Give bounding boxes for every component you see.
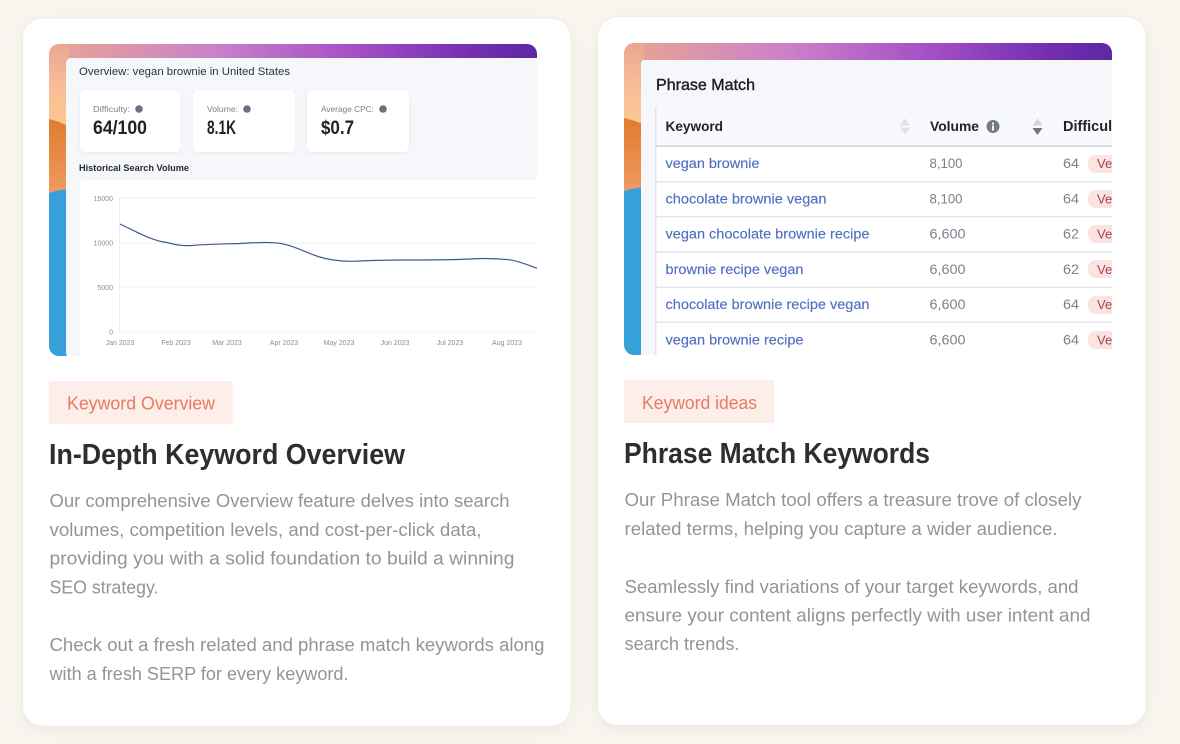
line chart: historical search volume: [80, 180, 550, 360]
row: chocolate brownie recipe vegan: Very: [1097, 297, 1124, 312]
line chart: historical search volume: Mar 2023: [212, 340, 242, 347]
line chart: historical search volume: Jun 2023: [381, 340, 410, 347]
metric: average cpc: [307, 90, 409, 152]
text block: overview description: with a fresh SERP for every keyword.: [48, 664, 348, 684]
text block: phrase match description: Seamlessly find variations of your target keywords, and: [624, 577, 1078, 597]
row: chocolate brownie vegan: Very: [1097, 192, 1124, 206]
row: vegan brownie recipe: 64: [1063, 332, 1079, 348]
line chart: historical search volume: 0: [109, 330, 113, 336]
screenshot: keyword overview: [47, 44, 550, 360]
row: vegan chocolate brownie recipe: [666, 225, 1128, 243]
line chart: historical search volume: 10000: [94, 240, 113, 248]
line chart: historical search volume: Apr 2023: [270, 340, 298, 347]
row: chocolate brownie vegan: 8,100: [930, 190, 963, 206]
line chart: historical search volume: Jan 2023: [106, 340, 135, 347]
text block: overview description: providing you with a solid foundation to build a winning: [50, 548, 514, 568]
line chart: historical search volume: 5000: [97, 285, 113, 292]
screenshot: phrase match table: [622, 43, 1128, 360]
heading: phrase match keywords: Phrase Match Keywords: [624, 438, 930, 470]
row: vegan chocolate brownie recipe: vegan chocolate brownie recipe: [666, 226, 870, 242]
tag: keyword overview: Keyword Overview: [67, 394, 216, 414]
row: vegan brownie recipe: [666, 331, 1128, 349]
tag: keyword overview: [49, 381, 232, 424]
keyword table: [655, 108, 1128, 358]
text block: phrase match description: ensure your content aligns perfectly with user intent and: [624, 606, 1090, 626]
text block: phrase match description: related terms, helping you capture a wider audience.: [624, 519, 1058, 539]
metric: volume: [193, 90, 295, 152]
panel: keyword overview card: [22, 18, 571, 726]
text block: phrase match description: [624, 490, 1090, 654]
row: brownie recipe vegan: Very: [1097, 262, 1124, 277]
tag: keyword ideas: [624, 380, 774, 423]
row: brownie recipe vegan: brownie recipe vegan: [666, 262, 804, 277]
text block: phrase match description: search trends.: [624, 634, 740, 654]
metric: volume: 8.1K: [207, 117, 236, 139]
metric: difficulty: 64/100: [93, 117, 147, 139]
text block: overview description: Our comprehensive Overview feature delves into search: [50, 491, 510, 511]
text block: overview description: volumes, competition levels, and cost-per-click data,: [50, 520, 482, 540]
overview title: Overview: vegan brownie in United States: [79, 66, 291, 78]
line chart: historical search volume: Aug 2023: [492, 340, 522, 347]
text block: overview description: SEO strategy.: [50, 578, 158, 598]
heading: in-depth keyword overview: In-Depth Keyword Overview: [49, 439, 406, 471]
row: chocolate brownie recipe vegan: 6,600: [930, 296, 966, 312]
table title: Phrase Match: [656, 77, 755, 94]
row: brownie recipe vegan: [666, 260, 1128, 278]
metric: difficulty: Difficulty:: [93, 105, 130, 114]
row: chocolate brownie recipe vegan: 64: [1063, 296, 1079, 312]
row: chocolate brownie vegan: [666, 190, 1128, 208]
row: chocolate brownie vegan: chocolate brownie vegan: [666, 192, 826, 206]
table header: Volume: [930, 118, 979, 134]
row: vegan brownie: Very: [1097, 156, 1124, 171]
table header: Difficulty: [1063, 119, 1125, 135]
line chart: historical search volume: Feb 2023: [161, 340, 191, 347]
row: vegan chocolate brownie recipe: 6,600: [930, 226, 966, 242]
row: vegan brownie recipe: Very: [1097, 332, 1124, 348]
row: vegan brownie recipe: 6,600: [930, 332, 966, 348]
row: chocolate brownie vegan: 64: [1063, 190, 1079, 206]
panel: phrase match card: [598, 16, 1146, 726]
metric: volume: Volume:: [207, 105, 238, 114]
line chart: historical search volume: Jul 2023: [437, 340, 463, 347]
row: chocolate brownie recipe vegan: chocolate brownie recipe vegan: [666, 297, 870, 312]
row: vegan brownie: vegan brownie: [666, 156, 760, 171]
row: brownie recipe vegan: 6,600: [930, 261, 966, 277]
chart heading: Historical Search Volume: [79, 163, 189, 173]
text block: overview description: Check out a fresh related and phrase match keywords along: [50, 635, 544, 655]
row: vegan chocolate brownie recipe: 62: [1063, 226, 1079, 242]
table header: Keyword: [666, 118, 723, 134]
row: vegan brownie: [666, 155, 1128, 173]
metric: average cpc: $0.7: [321, 117, 354, 139]
line chart: historical search volume: May 2023: [324, 340, 354, 347]
metric: average cpc: Average CPC:: [321, 105, 374, 114]
row: vegan chocolate brownie recipe: Very: [1097, 226, 1124, 242]
row: vegan brownie: 8,100: [930, 155, 963, 171]
tag: keyword ideas: Keyword ideas: [642, 393, 757, 413]
row: vegan brownie recipe: vegan brownie recipe: [666, 332, 804, 348]
icon: info: [986, 120, 1000, 133]
table header: [666, 118, 1125, 135]
metric: difficulty: [80, 90, 180, 152]
text block: phrase match description: Our Phrase Match tool offers a treasure trove of closely: [624, 490, 1082, 510]
row: vegan brownie: 64: [1063, 155, 1079, 171]
row: brownie recipe vegan: 62: [1063, 261, 1079, 277]
line chart: historical search volume: 15000: [94, 196, 113, 203]
text block: overview description: [48, 491, 544, 684]
row: chocolate brownie recipe vegan: [666, 296, 1128, 314]
